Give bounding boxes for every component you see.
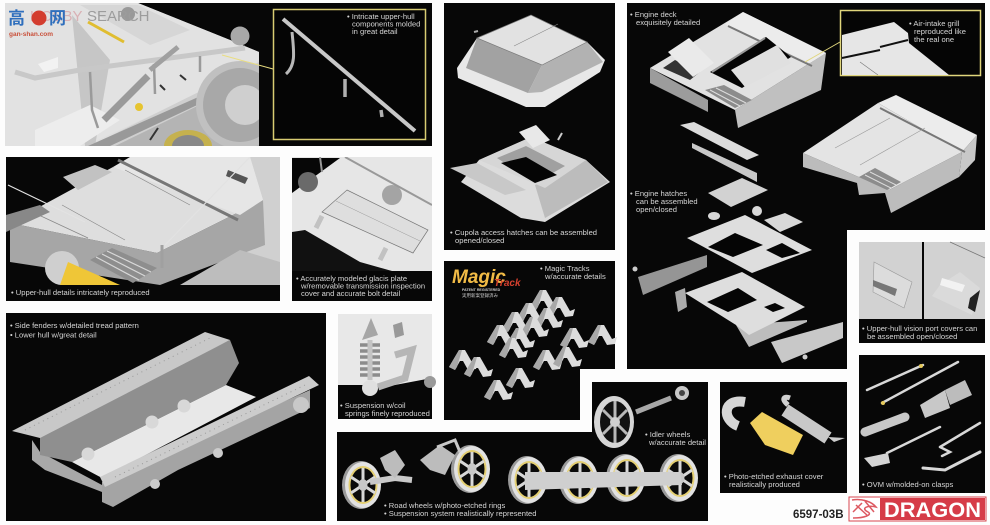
caption: glacis plate: cover and accurate bolt detail (301, 289, 401, 298)
exploded engine parts (632, 122, 843, 363)
caption: engine deck: exquisitely detailed (636, 18, 700, 27)
caption: air-intake grill: reproduced like (914, 27, 966, 36)
caption: road wheels: • Suspension system realistically represented (384, 509, 536, 518)
inset: hull rail (274, 10, 426, 140)
track links (449, 290, 617, 400)
caption: engine hatches: • Engine hatches (630, 189, 687, 198)
panel: upper-hull details (6, 157, 280, 301)
watermark (8, 8, 150, 38)
exhaust render (727, 397, 845, 455)
panel: exhaust cover (720, 382, 847, 493)
panel: suspension (338, 314, 436, 419)
vision port closed (859, 242, 922, 319)
caption: vision port covers: be assembled open/closed (867, 332, 957, 341)
caption: magic tracks: w/accurate details (544, 272, 606, 281)
panel: vision port covers (859, 242, 985, 343)
caption: upper-hull components: • Intricate upper-hull (347, 12, 415, 21)
glacis render (292, 157, 432, 271)
logo: Magic Track: Magic (452, 267, 506, 288)
panel: lower hull (6, 313, 326, 521)
panel: road wheels and idler (337, 382, 708, 521)
caption: exhaust cover: realistically produced (729, 480, 800, 489)
OVM tools (864, 362, 980, 470)
caption: air-intake grill: the real one (914, 35, 954, 44)
caption: upper-hull components: components molded (352, 20, 420, 29)
engine deck open (650, 12, 826, 128)
caption: idler wheels: w/accurate detail (648, 438, 706, 447)
road wheel assembly middle (420, 440, 490, 493)
panel: glacis plate (292, 157, 432, 301)
logo: Magic Track: Track (494, 278, 521, 289)
watermark: 网 (49, 9, 66, 28)
caption: magic tracks: • Magic Tracks (540, 264, 590, 273)
part number: 6597-03B (793, 509, 844, 521)
logo: Magic Track (452, 267, 521, 299)
watermark: HOBBY (30, 8, 83, 25)
caption: cupola hatches: opened/closed (455, 236, 504, 245)
suspension render (360, 318, 436, 396)
leader line to inset (222, 55, 273, 69)
caption: lower hull: • Lower hull w/great detail (10, 330, 97, 340)
suspension bogie chain (508, 454, 698, 504)
caption: engine hatches: open/closed (636, 205, 677, 214)
lower hull render (12, 332, 319, 507)
caption: suspension: • Suspension w/coil (340, 401, 406, 410)
panel: engine deck (627, 3, 985, 369)
caption: idler wheels: • Idler wheels (645, 430, 690, 439)
caption: engine hatches: can be assembled (636, 197, 698, 206)
engine deck closed (803, 95, 977, 213)
idler wheel (594, 386, 689, 448)
road wheel assembly left (342, 450, 412, 509)
watermark: gan-shan.com (9, 31, 53, 38)
caption: cupola hatches: • Cupola access hatches can be assembled (450, 228, 597, 237)
logo: Magic Track: PATENT REGISTERED (462, 288, 501, 292)
inset: air-intake grill (840, 10, 980, 76)
logo: Dragon: DRAGON (884, 499, 981, 522)
cupola open (450, 125, 610, 222)
caption: air-intake grill: • Air-intake grill (909, 19, 959, 28)
cupola closed (457, 15, 605, 107)
caption: exhaust cover: • Photo-etched exhaust cover (724, 472, 823, 481)
engine deck render (6, 157, 280, 285)
caption: glacis plate: • Accurately modeled glacis plate (296, 274, 407, 283)
watermark: 高 (8, 8, 25, 28)
caption: upper-hull components: in great detail (352, 27, 398, 36)
tank hull render (5, 3, 259, 146)
caption: engine deck: • Engine deck (630, 10, 677, 19)
leader line to inset (805, 42, 840, 62)
caption: road wheels: • Road wheels w/photo-etched rings (384, 501, 505, 510)
panel: cupola (444, 3, 615, 250)
caption: lower hull: • Side fenders w/detailed tread pattern (10, 321, 139, 330)
logo: Magic Track: 実用新案登録済み (462, 292, 498, 299)
watermark: SEARCH (87, 8, 150, 25)
caption: vision port covers: • Upper-hull vision port covers can (862, 324, 977, 333)
panel: OVM (859, 355, 985, 493)
panel: upper-hull components (5, 3, 432, 146)
logo: Dragon (849, 497, 986, 522)
caption: upper-hull details: • Upper-hull details intricately reproduced (11, 288, 150, 297)
vision port open (924, 242, 985, 319)
caption: suspension: springs finely reproduced (345, 409, 430, 418)
caption: OVM: • OVM w/molded-on clasps (862, 480, 953, 489)
panel: magic tracks (444, 261, 617, 420)
caption: glacis plate: w/removable transmission inspection (300, 282, 425, 291)
